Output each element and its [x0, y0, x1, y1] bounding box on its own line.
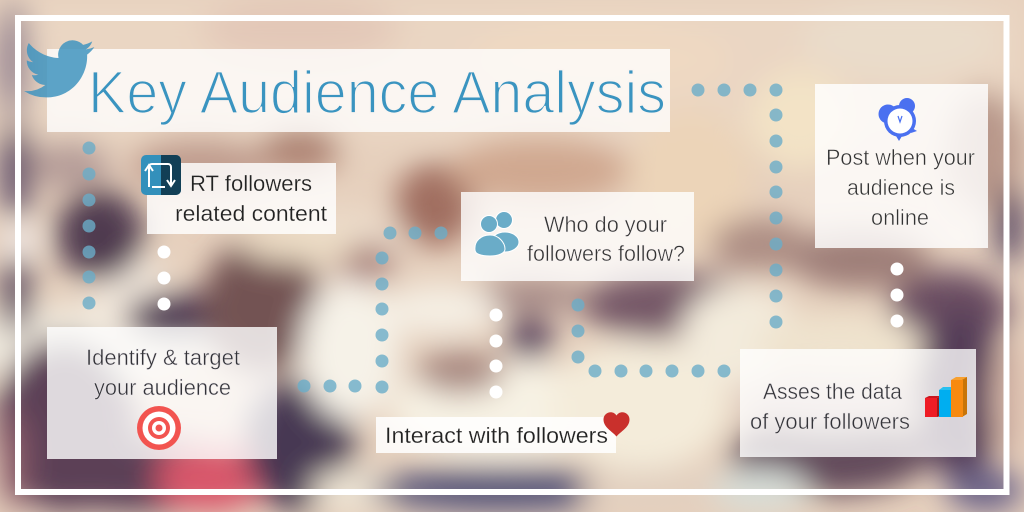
panel: identify and target: [47, 327, 277, 459]
asses text: of your followers: [750, 409, 910, 434]
white dots: RT to identify: [158, 246, 170, 310]
blue dotted path: title to right column: [692, 84, 782, 328]
panel: title background: [47, 49, 670, 132]
who text: followers follow?: [527, 241, 685, 266]
post text: online: [871, 205, 929, 230]
icon: alarm clock: [878, 98, 917, 141]
icon: people: [475, 212, 519, 256]
panel: post when online: [815, 84, 988, 248]
icon: heart: [604, 412, 630, 436]
blue dotted path: who to asses: [572, 298, 730, 378]
icon: bar chart: [925, 377, 967, 417]
icon: twitter bird: [24, 40, 94, 97]
asses text: Asses the data: [763, 379, 903, 404]
panel: RT followers: [141, 155, 336, 234]
icon: retweet: [141, 155, 181, 195]
title: Key Audience Analysis: [88, 59, 666, 126]
panel: interact with followers: [376, 417, 616, 453]
panel: who do your followers follow: [461, 192, 694, 281]
white dots: post to asses: [890, 262, 904, 328]
blue dotted path: left column: [82, 142, 96, 310]
identify text: Identify & target: [86, 345, 240, 370]
RT text: RT followers: [190, 171, 312, 196]
RT text: related content: [175, 201, 327, 226]
panel: asses the data: [740, 349, 976, 457]
blue dotted path: identify to who: [298, 226, 448, 394]
post text: Post when your: [826, 145, 975, 170]
post text: audience is: [847, 175, 955, 200]
who text: Who do your: [544, 212, 667, 237]
icon: target: [137, 406, 181, 450]
interact text: Interact with followers: [385, 423, 608, 448]
white dots: who to interact: [490, 308, 502, 398]
identify text: your audience: [94, 375, 231, 400]
